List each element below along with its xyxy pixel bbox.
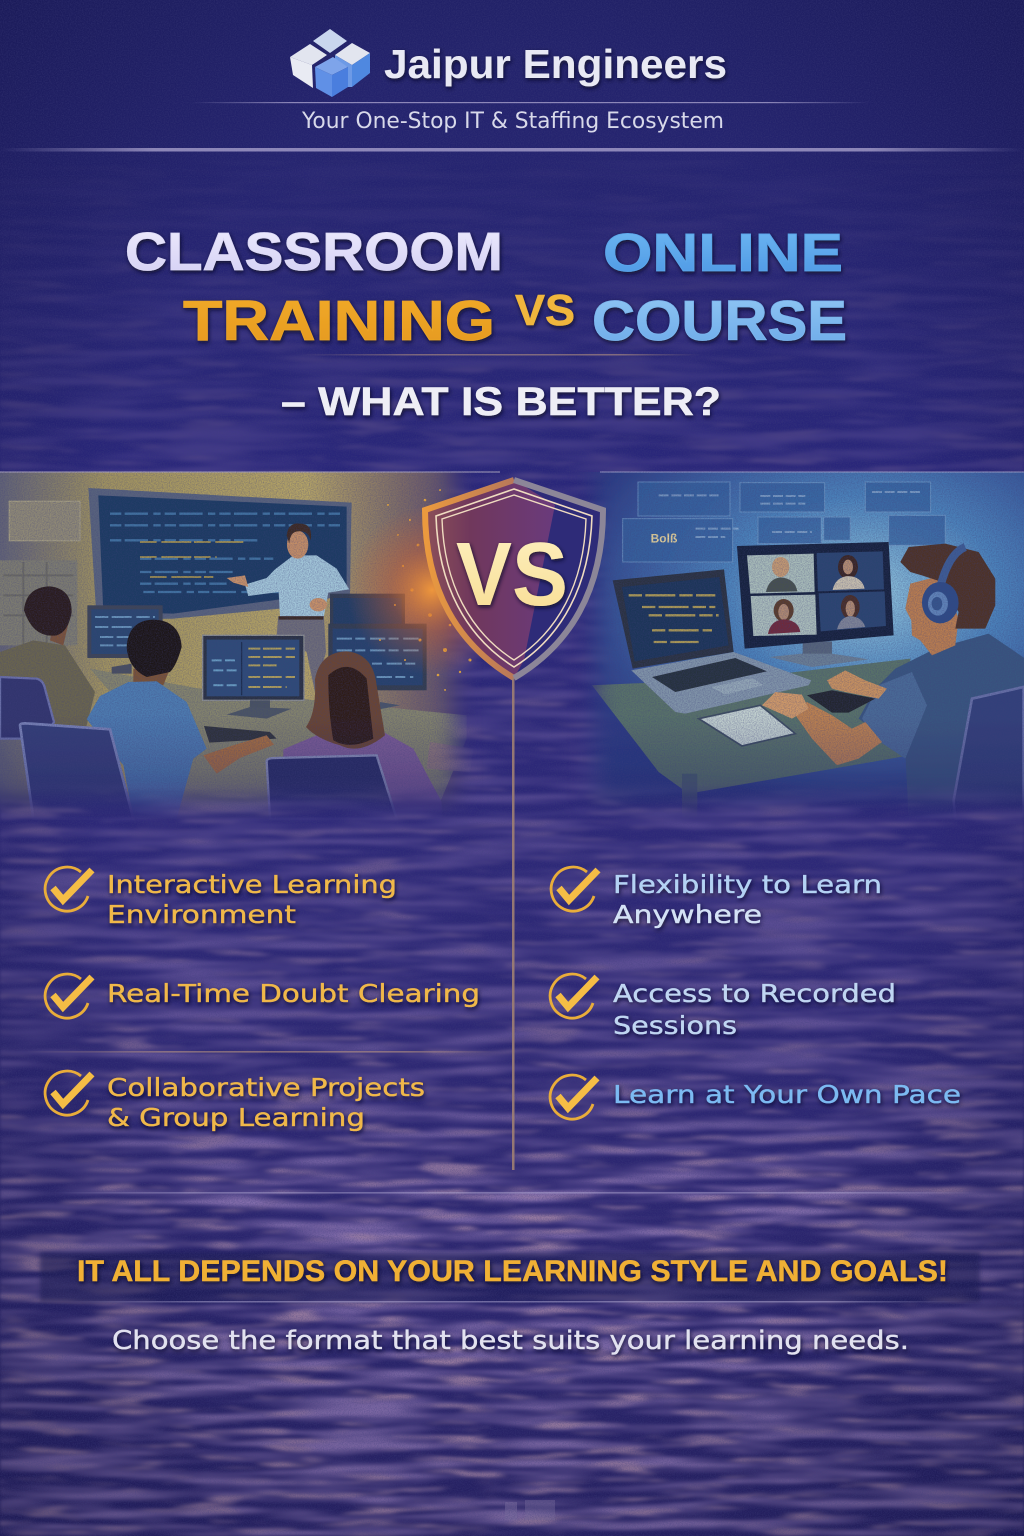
icon: logo cubes [290, 29, 370, 97]
tagline: Your One-Stop IT & Staffing Ecosystem [301, 109, 724, 134]
big screen [88, 488, 352, 620]
header band rule [0, 148, 1024, 152]
center divider [512, 678, 514, 1170]
title [125, 222, 847, 424]
classroom top edge [0, 471, 500, 473]
title: classroom: CLASSROOM [125, 222, 503, 282]
right benefits list [550, 867, 961, 1119]
left benefits list [45, 867, 480, 1132]
learner [762, 544, 1024, 819]
brand name: Jaipur Engineers [384, 41, 727, 87]
item: interactive learning [45, 867, 397, 929]
scene shade [0, 734, 460, 809]
footer rule [50, 1192, 980, 1194]
item: flexibility: Anywhere [613, 900, 762, 929]
paper on desk [427, 742, 467, 772]
shield inner lines [436, 489, 592, 667]
item: interactive learning: Interactive Learning [107, 870, 397, 899]
vs text: VS [456, 525, 568, 625]
shield outline left [425, 480, 514, 678]
item: real-time doubt clearing [45, 974, 480, 1018]
title: online: ONLINE [603, 223, 843, 283]
item: collaborative projects [45, 1071, 425, 1132]
illustration: online learner [584, 472, 1024, 812]
panel label: Bolß [651, 532, 677, 546]
desk [592, 659, 910, 794]
title: training: TRAINING [183, 289, 495, 353]
notepad [699, 705, 795, 746]
header rule [190, 102, 870, 103]
room wall [586, 472, 1024, 808]
item: recorded sessions [550, 974, 896, 1040]
shield outline right [514, 480, 603, 678]
item: real-time doubt clearing: Real-Time Doubt Clearing [107, 979, 480, 1008]
item: own pace [550, 1075, 961, 1119]
floating panels [623, 482, 945, 562]
keyboard [204, 726, 277, 743]
shield body [425, 480, 603, 678]
header [190, 29, 870, 134]
desk [90, 669, 467, 819]
headphones [922, 547, 965, 623]
online scene top edge [600, 471, 1024, 473]
monitor left [87, 605, 163, 674]
closing statement [70, 1255, 960, 1356]
scene shade [532, 472, 1024, 819]
monitor [737, 542, 894, 667]
gold particles [379, 489, 476, 691]
posters [0, 501, 80, 645]
desk leg [682, 774, 698, 806]
closing text: Choose the format that best suits your learning needs. [112, 1326, 909, 1356]
vs shield [347, 480, 603, 678]
subtitle: – WHAT IS BETTER? [281, 380, 721, 424]
teacher [227, 523, 349, 692]
title: course: COURSE [592, 289, 847, 353]
monitor centre [203, 635, 304, 719]
panel text lines [659, 492, 922, 537]
student right [267, 651, 442, 819]
list separator [25, 1051, 500, 1053]
item: own pace: Learn at Your Own Pace [613, 1080, 961, 1109]
item: recorded sessions: Sessions [613, 1011, 737, 1040]
classroom wall [0, 472, 497, 819]
item: flexibility [551, 867, 882, 929]
item: flexibility: Flexibility to Learn [613, 870, 882, 899]
student centre [20, 620, 274, 819]
item: interactive learning: Environment [107, 900, 296, 929]
video participants [766, 555, 865, 634]
item: collaborative projects: Collaborative Projects [107, 1073, 425, 1102]
monitors right [328, 594, 427, 709]
item: recorded sessions: Access to Recorded [613, 979, 896, 1008]
title rule [300, 354, 700, 356]
student left [0, 586, 95, 739]
item: collaborative projects: & Group Learning [107, 1103, 365, 1132]
illustration: classroom [0, 472, 497, 819]
chair [954, 687, 1024, 819]
laptop [613, 569, 811, 714]
closing rule [70, 1301, 960, 1302]
call to action heading: IT ALL DEPENDS ON YOUR LEARNING STYLE AND GOALS! [77, 1255, 948, 1288]
title: vs: VS [515, 286, 575, 335]
